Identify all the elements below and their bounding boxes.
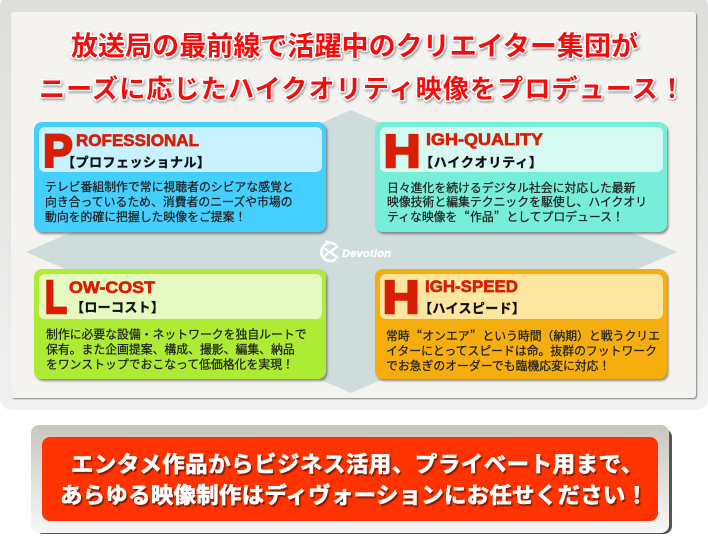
logo: Devotion: Devotion [342,248,391,260]
heading: HIGH-QUALITY: H [384,125,421,177]
heading: HIGH-SPEED: 【ハイスピード】 [419,298,525,317]
text block [46,326,307,372]
text block: 向き合っているため、消費者のニーズや市場の [45,193,293,210]
text block: 動向を的確に把握した映像をご提案！ [45,208,246,225]
heading: LOW-COST [45,271,164,323]
call to action text [60,452,648,508]
heading: LOW-COST: L [45,271,67,323]
panel: PROFESSIONAL [34,122,326,232]
diamond background [26,110,677,393]
panel: HIGH-SPEED [375,269,667,379]
panel: call to action [31,425,672,534]
text block: テレビ番組制作で常に視聴者のシビアな感覚と [45,178,294,195]
icon: Devotion mark [321,241,338,261]
call to action text: エンタメ作品からビジネス活用、プライベート用まで、 [71,452,643,477]
text block: 常時 “オンエア” という時間（納期）と戦うクリエ [386,327,660,344]
panel: HIGH-QUALITY [375,122,667,232]
heading: LOW-COST: 【ローコスト】 [71,297,164,316]
heading: HIGH-SPEED [383,271,525,323]
heading: PROFESSIONAL: 【プロフェッショナル】 [62,152,210,171]
text block: イターにとってスピードは命。抜群のフットワーク [386,342,657,359]
heading: HIGH-QUALITY: IGH-QUALITY [426,130,544,149]
heading: PROFESSIONAL [43,125,210,177]
heading: HIGH-SPEED: IGH-SPEED [425,277,518,296]
text block: でお急ぎのオーダーでも臨機応変に対応！ [386,357,610,374]
text block [45,178,294,225]
heading: HIGH-QUALITY: 【ハイクオリティ】 [420,152,542,171]
title [39,30,685,104]
heading: PROFESSIONAL: ROFESSIONAL [76,131,199,150]
call to action text: あらゆる映像制作はディヴォーションにお任せください！ [60,482,648,508]
title: ニーズに応じたハイクオリティ映像をプロデュース！ [39,74,685,104]
text block: をワンストップでおこなって低価格化を実現！ [46,356,294,372]
text block: 映像技術と編集テクニックを駆使し、ハイクオリ [387,193,647,210]
heading: PROFESSIONAL: P [43,125,73,177]
text block: 制作に必要な設備・ネットワークを独自ルートで [46,326,307,342]
heading: LOW-COST: OW-COST [69,278,156,297]
heading: HIGH-QUALITY [384,125,544,177]
logo: Devotion [321,241,391,261]
heading: HIGH-SPEED: H [383,271,420,323]
text block: 保有。また企画提案、構成、撮影、編集、納品 [46,340,295,358]
panel: LOW-COST [34,269,326,379]
title: 放送局の最前線で活躍中のクリエイター集団が [71,30,638,62]
text block [386,327,660,374]
text block [387,179,647,225]
text block: ティな映像を “作品” としてプロデュース！ [387,208,624,225]
text block: 日々進化を続けるデジタル社会に対応した最新 [387,179,636,196]
panel: main background [0,0,708,410]
